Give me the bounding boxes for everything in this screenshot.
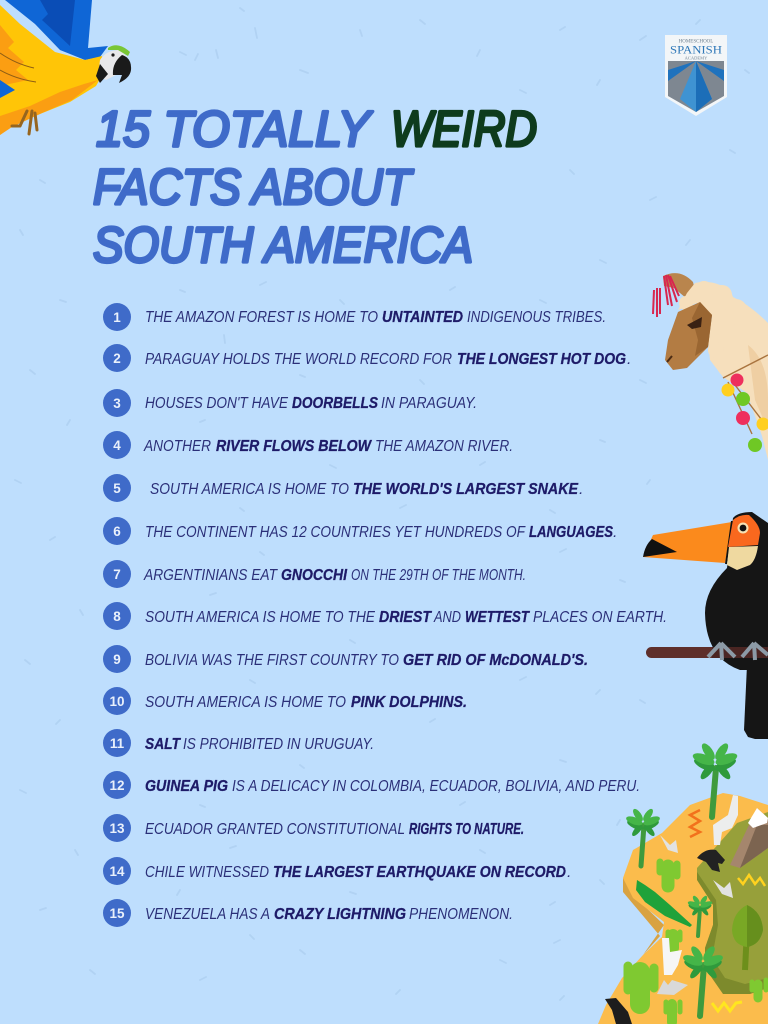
fact 1: 1: [113, 310, 121, 325]
fact 14: 14: [109, 864, 125, 879]
toucan face: [728, 515, 760, 547]
fact 1: [103, 303, 606, 331]
fact 14: THE LARGEST EARTHQUAKE ON RECORD: [273, 864, 566, 881]
fact 3: HOUSES DON'T HAVE: [145, 395, 288, 412]
parrot wing: [5, 0, 108, 60]
fact 3: DOORBELLS: [292, 395, 378, 412]
title: [93, 101, 537, 273]
fact 1: UNTAINTED: [382, 309, 463, 326]
fact 5: SOUTH AMERICA IS HOME TO: [150, 481, 349, 498]
toucan illustration: [643, 512, 768, 739]
fact 2: THE LONGEST HOT DOG: [457, 351, 626, 368]
fact 15: [103, 899, 513, 927]
map crocodile: [636, 880, 692, 927]
map land edge: [623, 878, 664, 955]
title: SOUTH AMERICA: [93, 217, 473, 273]
toucan body: [705, 512, 768, 670]
logo: Homeschool Spanish Academy shield: HOMESCHOOL: [679, 40, 713, 44]
fact 8: WETTEST: [465, 609, 530, 626]
fact 14: [103, 857, 571, 885]
fact 5: 5: [113, 481, 121, 496]
fact 6: .: [613, 524, 617, 541]
fact 5: THE WORLD'S LARGEST SNAKE: [353, 481, 579, 498]
fact 4: THE AMAZON RIVER.: [375, 438, 513, 455]
fact 2: 2: [113, 351, 121, 366]
parrot foot: [12, 111, 37, 134]
fact 11: IS PROHIBITED IN URUGUAY.: [183, 736, 374, 753]
fact 9: GET RID OF McDONALD'S.: [403, 652, 588, 669]
fact 8: PLACES ON EARTH.: [533, 609, 667, 626]
fact 4: [103, 431, 513, 459]
parrot body: [0, 5, 104, 135]
South America map illustration: [598, 741, 768, 1024]
fact 12: GUINEA PIG: [145, 778, 228, 795]
fact 9: BOLIVIA WAS THE FIRST COUNTRY TO: [145, 652, 399, 669]
fact 7: ARGENTINIANS EAT: [143, 567, 278, 584]
llama illustration: [653, 273, 768, 460]
fact 10: PINK DOLPHINS.: [351, 694, 467, 711]
llama pompom necklace: [723, 355, 768, 434]
title: FACTS ABOUT: [93, 159, 414, 215]
logo: Homeschool Spanish Academy shield: ACADEMY: [685, 56, 708, 60]
fact 7: ON THE 29TH OF THE MONTH.: [351, 567, 526, 584]
fact 13: RIGHTS TO NATURE.: [409, 821, 524, 838]
fact 8: [103, 602, 667, 630]
map palm trees: [625, 741, 739, 1016]
fact 15: VENEZUELA HAS A: [145, 906, 270, 923]
fact 8: 8: [113, 609, 121, 624]
fact 6: [103, 517, 617, 545]
fact 2: PARAGUAY HOLDS THE WORLD RECORD FOR: [145, 351, 452, 368]
llama face: [665, 302, 712, 370]
fact 10: 10: [109, 694, 125, 709]
fact 3: 3: [113, 396, 121, 411]
fact 1: INDIGENOUS TRIBES.: [467, 309, 606, 326]
fact 11: SALT: [145, 736, 181, 753]
fact 6: 6: [113, 524, 121, 539]
fact 3: [103, 389, 477, 417]
fact 3: IN PARAGUAY.: [381, 395, 477, 412]
fact 7: 7: [113, 567, 121, 582]
title: WEIRD: [391, 101, 537, 157]
fact 15: CRAZY LIGHTNING: [274, 906, 406, 923]
fact 8: SOUTH AMERICA IS HOME TO THE: [145, 609, 375, 626]
fact 7: [103, 560, 526, 588]
fact 2: [103, 344, 631, 372]
fact 5: .: [579, 481, 583, 498]
fact 6: THE CONTINENT HAS 12 COUNTRIES YET HUNDREDS OF: [145, 524, 526, 541]
fact 9: [103, 645, 588, 673]
llama ear: [663, 273, 698, 303]
parrot head: [98, 50, 127, 80]
fact 4: RIVER FLOWS BELOW: [216, 438, 373, 455]
map llamas: [713, 795, 738, 845]
fact 12: [103, 771, 640, 799]
map bears: [697, 850, 725, 872]
fact 14: CHILE WITNESSED: [145, 864, 269, 881]
fact 15: PHENOMENON.: [409, 906, 513, 923]
fact 9: 9: [113, 652, 121, 667]
fact 12: 12: [109, 778, 125, 793]
fact 4: 4: [113, 438, 121, 453]
fact 6: LANGUAGES: [529, 524, 613, 541]
fact 11: 11: [110, 736, 125, 751]
map snakes: [690, 810, 700, 837]
fact 4: ANOTHER: [143, 438, 211, 455]
logo: Homeschool Spanish Academy shield: [665, 35, 727, 116]
fact 10: SOUTH AMERICA IS HOME TO: [145, 694, 346, 711]
title: 15 TOTALLY: [96, 101, 374, 157]
fact 13: [103, 814, 524, 842]
parrot illustration: [0, 0, 131, 135]
fact 2: .: [627, 351, 631, 368]
fact 5: [103, 474, 583, 502]
fact 13: 13: [109, 821, 125, 836]
fact 1: THE AMAZON FOREST IS HOME TO: [145, 309, 378, 326]
map cacti: [628, 862, 766, 1022]
toucan feet: [708, 643, 768, 660]
fact 15: 15: [109, 906, 125, 921]
fact 10: [103, 687, 467, 715]
fact 8: DRIEST: [379, 609, 432, 626]
map sandy land: [598, 793, 768, 1024]
map mountain: [730, 808, 768, 868]
fact 7: GNOCCHI: [281, 567, 347, 584]
map green region: [697, 812, 768, 992]
fact 11: [103, 729, 374, 757]
fact 13: ECUADOR GRANTED CONSTITUTIONAL: [145, 821, 405, 838]
logo: Homeschool Spanish Academy shield: SPANISH: [670, 44, 722, 56]
fact 14: .: [567, 864, 571, 881]
toucan beak: [643, 522, 732, 563]
llama tassel: [653, 275, 679, 317]
fact 8: AND: [433, 609, 461, 626]
toucan perch: [646, 647, 768, 658]
toucan tail: [744, 665, 768, 739]
llama wool: [678, 282, 768, 460]
fact 12: IS A DELICACY IN COLOMBIA, ECUADOR, BOLIVIA, AND PERU.: [232, 778, 640, 795]
map tree: [745, 930, 747, 970]
